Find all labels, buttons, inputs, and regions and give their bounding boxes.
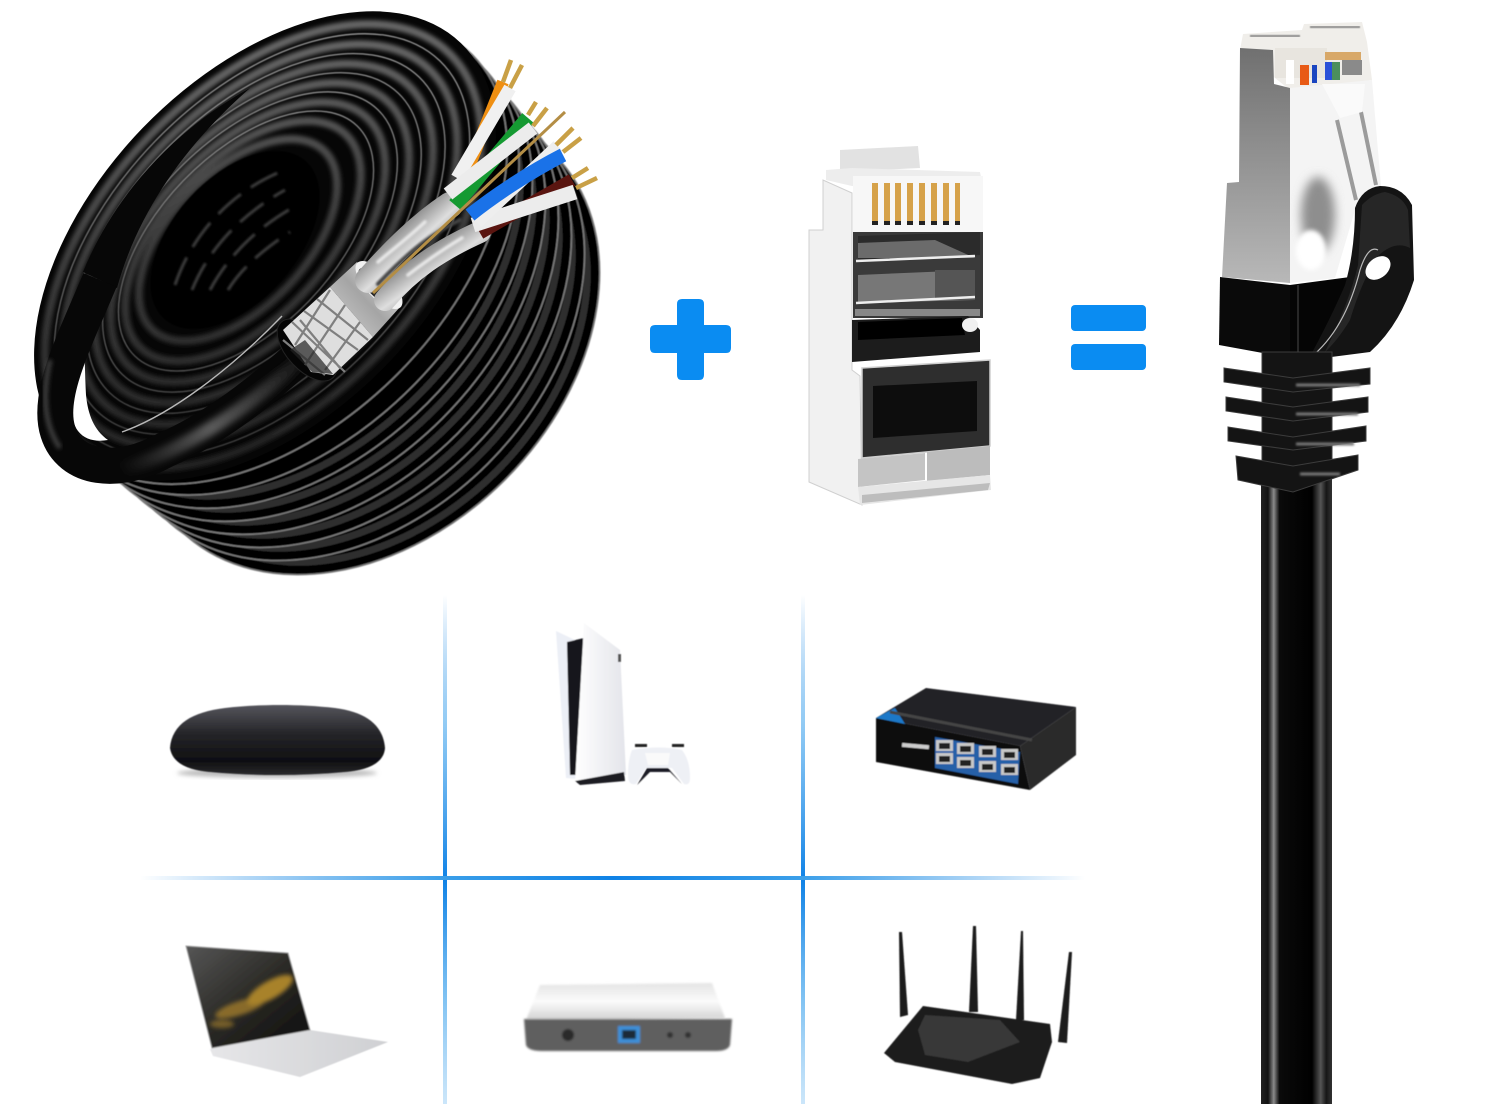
plug black boot [1219, 277, 1350, 358]
laptop base [210, 1030, 388, 1077]
coil white gap [71, 345, 108, 441]
coil side stack [0, 0, 692, 667]
connector silver base [858, 446, 991, 505]
modem port [618, 1026, 640, 1043]
connector side body [809, 180, 862, 505]
braided shield [283, 287, 373, 375]
connector clear head with gold pins [853, 176, 983, 232]
device: modem [524, 983, 732, 1051]
coil top rings [0, 0, 583, 567]
coil centre hole [118, 120, 352, 360]
device: game console and controller [556, 623, 690, 785]
cable run [1261, 470, 1332, 1104]
device: laptop [186, 946, 388, 1077]
controller [628, 744, 690, 785]
console [556, 623, 626, 785]
RJ45 connector [809, 146, 991, 505]
foil band [330, 254, 410, 337]
switch ports [935, 737, 1020, 784]
device: wireless router [884, 926, 1072, 1084]
equals sign [1071, 305, 1146, 370]
wire: orange pair [457, 60, 522, 178]
wire: brown pair [473, 168, 597, 233]
drain wire [373, 112, 565, 293]
front cable tube [45, 88, 312, 470]
wire: blue pair [470, 128, 581, 222]
router body [884, 1006, 1052, 1084]
cable coil [0, 0, 692, 667]
device: TV box [170, 705, 385, 778]
plug transparent head [1240, 22, 1372, 90]
connector black panel [862, 360, 990, 458]
plug shield grey side [1222, 48, 1290, 283]
laptop wallpaper glow [210, 969, 297, 1028]
grid dividers [140, 595, 1085, 1104]
device: network switch [876, 688, 1076, 790]
plug shield silver front [1290, 80, 1381, 283]
wire: green pair [448, 102, 547, 205]
router antennas [899, 926, 1072, 1043]
connector latch [852, 316, 980, 362]
connector top tab [826, 146, 982, 186]
plus sign [650, 299, 731, 380]
strain relief highlights [1296, 385, 1360, 474]
plug latch with hole [1308, 186, 1414, 360]
cable end sheath [266, 309, 348, 391]
patch cable with plug [1219, 22, 1414, 1104]
connector metal windows [853, 232, 983, 318]
strain relief fins [1224, 352, 1370, 492]
laptop screen [186, 946, 310, 1048]
foil twisted pairs [368, 205, 480, 300]
